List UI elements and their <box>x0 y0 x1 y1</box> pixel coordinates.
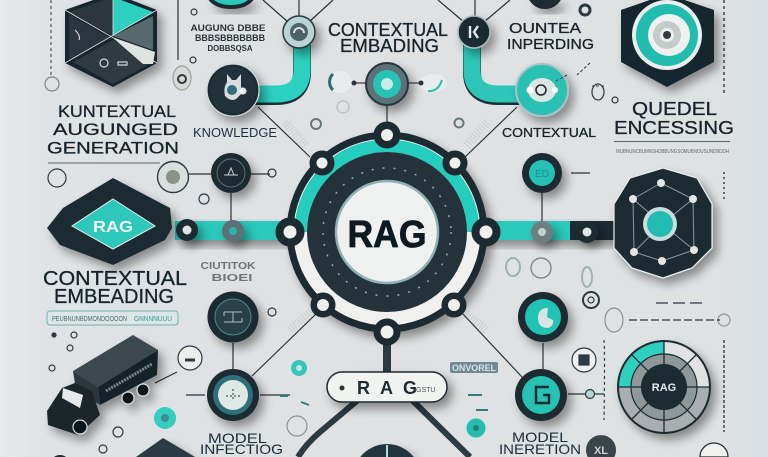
panel: top left hexagon <box>65 0 157 87</box>
heading: Contextual embading: CONTEXTUAL <box>328 20 448 40</box>
node: top right hexagon with rings <box>621 0 714 87</box>
heading: Ountea inperding <box>507 20 594 53</box>
heading: Contextual embading: EMBADING <box>340 36 439 56</box>
node: lower right teal G <box>515 369 567 421</box>
dark badge circle: XL <box>594 445 608 457</box>
heading: Contextual embeading: CONTEXTUAL <box>43 268 187 290</box>
heading: Model inerétion: MODEL <box>512 429 568 445</box>
caption pill <box>47 311 178 325</box>
heading: Model infectiog: INFECTIOG <box>200 441 283 457</box>
teal arc <box>294 140 480 232</box>
heading: Contextual embading <box>328 20 448 56</box>
node: teal right <box>516 64 568 116</box>
node: lower left pale <box>207 369 259 421</box>
heading: Model infectiog <box>200 430 283 457</box>
heading: small gibberish block: DOBBSQSA <box>208 44 253 53</box>
heading: gray small label: CIUTITOK <box>200 261 256 272</box>
icon: side blob left <box>328 71 366 93</box>
heading: gray small label <box>200 261 256 284</box>
heading: Ountea inperding: OUNTEA <box>509 20 581 37</box>
heading: Model infectiog: MODEL <box>208 430 267 446</box>
bottom hub <box>360 444 414 457</box>
dark badge circle <box>586 435 616 457</box>
teal connector right <box>472 45 520 96</box>
teal connector left <box>255 45 302 96</box>
small white badge <box>700 443 728 457</box>
node: left row gray ring <box>158 162 188 192</box>
label: RAG: RAG <box>93 219 133 236</box>
panel: right hexagon network <box>614 168 712 278</box>
node: lower left dark <box>208 292 258 342</box>
panel: donut chart: RAG <box>652 382 676 394</box>
heading: Kuntextual augunged generation <box>47 102 179 158</box>
connector lines <box>155 0 604 395</box>
outer ring <box>290 135 484 329</box>
heading: Kuntextual augunged generation: GENERATION <box>47 138 179 158</box>
node: top centre teal <box>366 63 408 105</box>
caption: encessing tiny text: MUBNUNCBUMNSHDBBUNGSOMUBNOUSUNDBDDH <box>616 149 729 155</box>
node: contextual teal small <box>522 153 562 193</box>
heading: Quedel encessing: ENCESSING <box>614 118 734 138</box>
node: top dark half circle <box>528 0 562 9</box>
badge: Onvorel: ONVOREL <box>452 363 496 374</box>
panel: bottom dark box <box>136 438 195 457</box>
icon: bottom left dark arc <box>54 455 66 457</box>
node: knowledge dark <box>207 64 259 116</box>
heading: Model inerétion <box>499 429 581 457</box>
heading: Knowledge: KNOWLEDGE <box>193 126 277 140</box>
white hub <box>336 181 438 283</box>
title: RAG: RAG <box>348 214 426 256</box>
small teal dots <box>154 360 488 438</box>
heading: small gibberish block <box>190 23 266 53</box>
icon: side blob right <box>408 74 447 92</box>
central RAG wheel <box>276 122 500 345</box>
heading: Kuntextual augunged generation: KUNTEXTUAL <box>58 102 176 121</box>
node: top teal half circle <box>207 0 255 9</box>
caption pill: PEUBNUNBDMONDOOOON <box>52 316 127 323</box>
heading: Quedel encessing <box>614 99 734 138</box>
node: top right dark <box>458 16 490 48</box>
node: top left ring <box>283 16 315 48</box>
node: lower right teal <box>518 292 568 342</box>
heading: Contextual right: CONTEXTUAL <box>502 125 596 140</box>
pill: RAG: RAG <box>357 378 417 398</box>
dark ring <box>307 152 467 312</box>
caption pill: GNNNNUUU <box>134 316 172 323</box>
pill: RAG <box>327 372 447 402</box>
icon: truck <box>47 335 158 435</box>
heading: Kuntextual augunged generation: AUGUNGED <box>53 120 178 139</box>
horizontal teal bar <box>175 221 620 240</box>
pill: RAG: GSTU <box>416 387 435 394</box>
node: contextual teal small: ED <box>535 169 549 180</box>
heading: small gibberish block: BBBSBBBBBBB <box>195 33 265 43</box>
bar nodes left <box>176 219 244 242</box>
heading: Contextual embeading: EMBEADING <box>54 286 174 308</box>
icon: hexagon glyphs <box>75 30 127 67</box>
node: left row dark <box>211 153 251 193</box>
heading: Model inerétion: INERETION <box>499 441 581 457</box>
wheel nodes <box>276 122 500 345</box>
heading: Quedel encessing: QUEDEL <box>632 99 717 119</box>
panel: donut chart <box>617 340 711 434</box>
bar nodes right <box>531 221 598 243</box>
bottom connectors <box>298 335 470 457</box>
heading: Contextual embeading <box>43 268 187 308</box>
panel: RAG diamond <box>47 178 172 265</box>
heading: small gibberish block: AUGUNG DBBE <box>190 23 266 33</box>
heading: gray small label: BIOEI <box>212 273 253 284</box>
heading: Ountea inperding: INPERDING <box>507 36 594 53</box>
